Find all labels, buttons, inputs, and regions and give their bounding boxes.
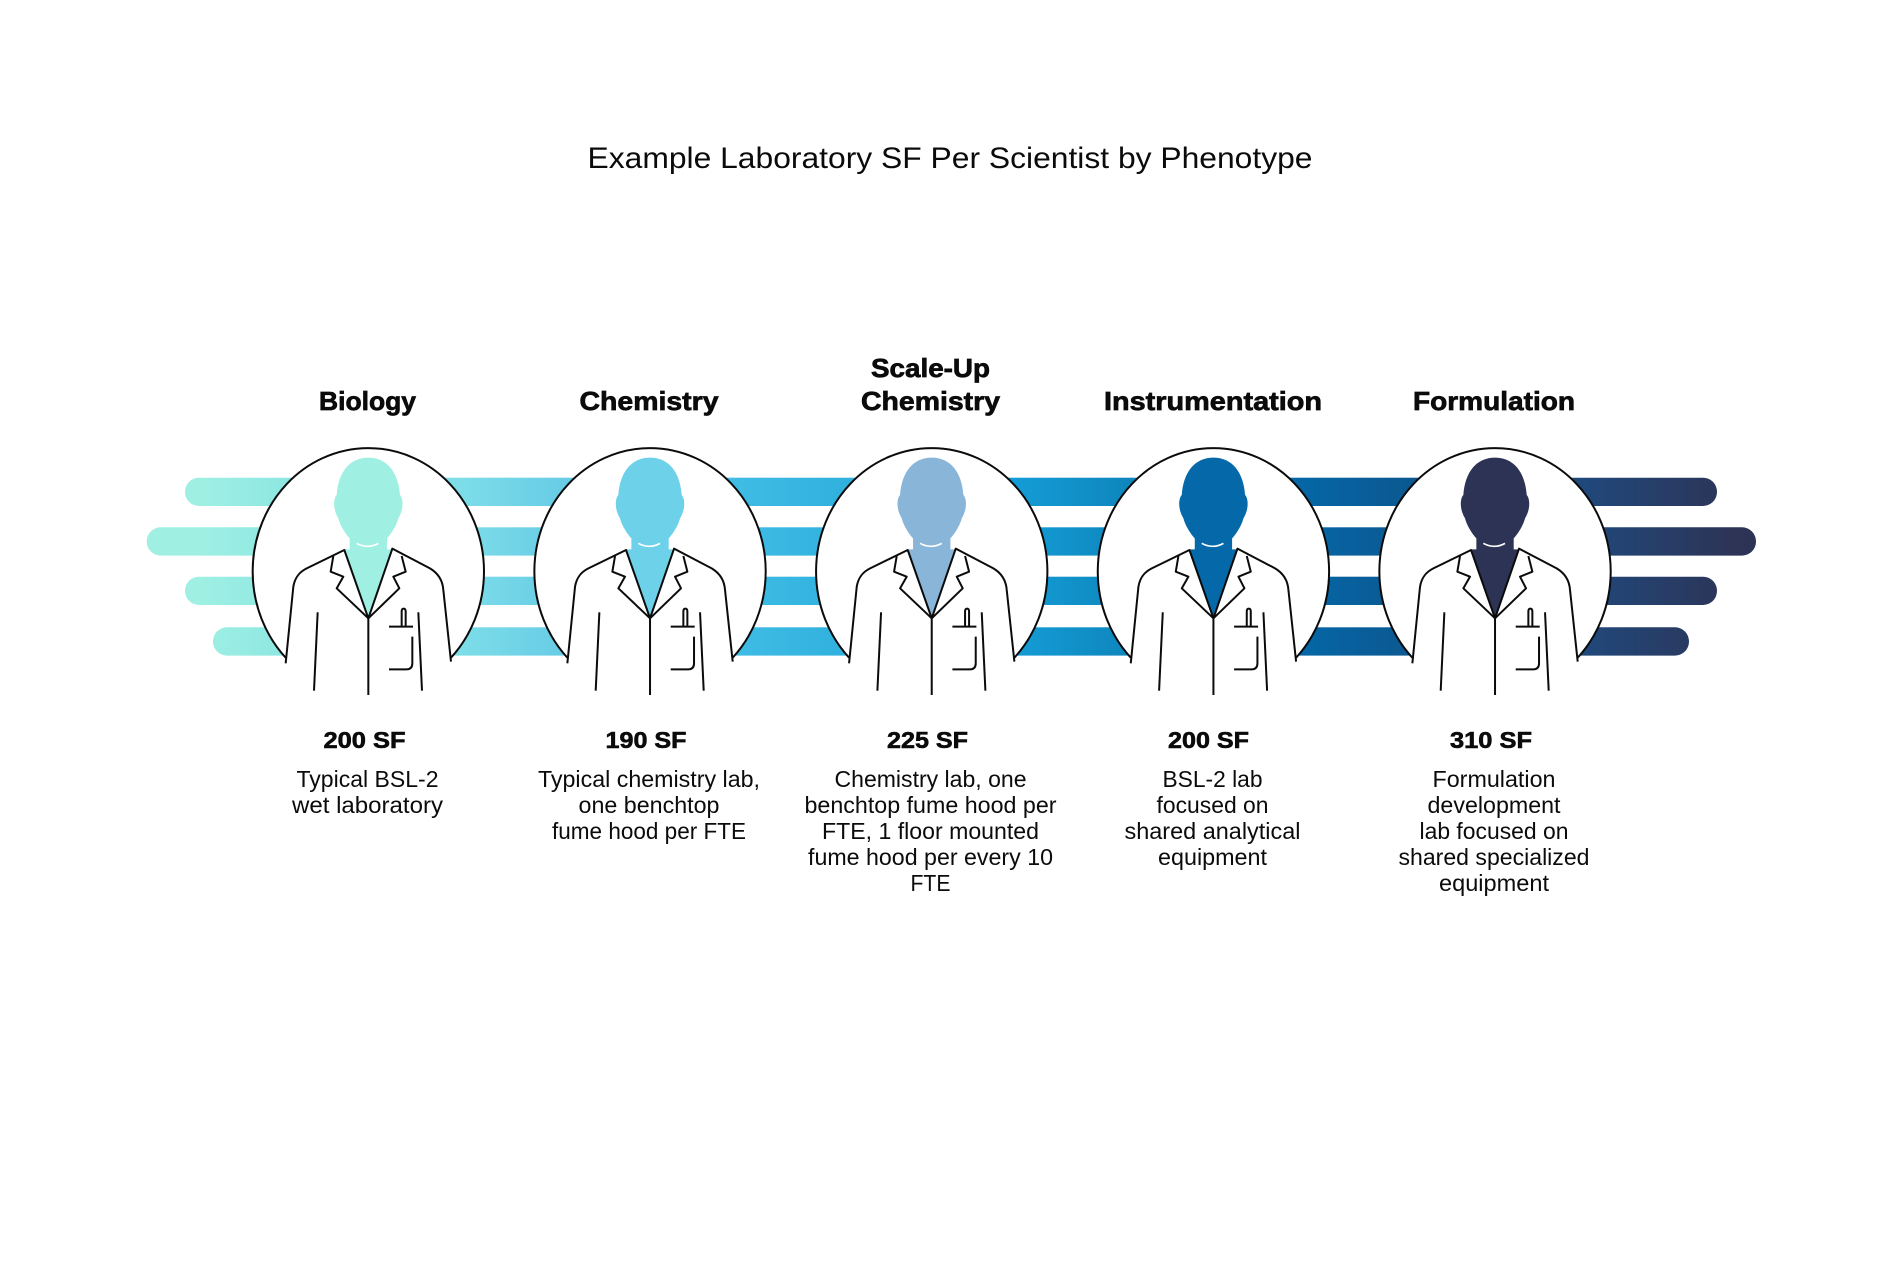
panel: Formulation — [1379, 386, 1611, 896]
description: Scale-Up Chemistry — [804, 766, 1057, 896]
description: Formulation: equipment — [1439, 870, 1550, 896]
description: Biology: wet laboratory — [291, 792, 444, 818]
description: Chemistry: Typical chemistry lab, — [538, 766, 760, 792]
panel: Scale-Up Chemistry — [804, 353, 1057, 896]
description: Scale-Up Chemistry: fume hood per every 10 — [808, 844, 1053, 870]
value: 200 SF: 200 SF — [1168, 727, 1249, 753]
icon: scientist, Chemistry — [534, 448, 766, 695]
description: Scale-Up Chemistry: Chemistry lab, one — [834, 766, 1026, 792]
description: Scale-Up Chemistry: benchtop fume hood per — [804, 792, 1057, 818]
bars: Chemistry to Scale-Up Chemistry — [650, 478, 932, 656]
description: Instrumentation: BSL-2 lab — [1162, 766, 1262, 792]
description: Chemistry: fume hood per FTE — [552, 818, 746, 844]
description: Biology: Typical BSL-2 — [296, 766, 438, 792]
description: Scale-Up Chemistry: FTE, 1 floor mounted — [822, 818, 1039, 844]
panel: Biology — [253, 386, 484, 818]
bars: left of Biology — [147, 478, 368, 656]
description: Formulation: lab focused on — [1420, 818, 1568, 844]
value: 200 SF: 200 SF — [324, 727, 406, 753]
description: Chemistry: one benchtop — [578, 792, 720, 818]
description: Instrumentation — [1124, 766, 1300, 870]
description: Formulation: Formulation — [1432, 766, 1556, 792]
icon: scientist, Instrumentation — [1098, 448, 1329, 695]
icon: scientist, Formulation — [1379, 448, 1611, 695]
title: Example Laboratory SF Per Scientist by Phenotype — [588, 142, 1312, 175]
striped bars band — [147, 478, 1756, 656]
icon: scientist, Biology — [253, 448, 484, 695]
bars: right of Formulation — [1495, 478, 1756, 656]
heading: Instrumentation: Instrumentation — [1104, 386, 1322, 416]
value: 225 SF: 225 SF — [887, 727, 968, 753]
value: 310 SF: 310 SF — [1450, 727, 1532, 753]
description: Formulation: development — [1428, 792, 1561, 818]
description: Biology — [291, 766, 444, 818]
bars: Instrumentation to Formulation — [1213, 478, 1495, 656]
description: Formulation — [1398, 766, 1590, 896]
value: 190 SF: 190 SF — [606, 727, 686, 753]
heading: Scale-Up Chemistry: Chemistry — [861, 386, 1001, 416]
description: Scale-Up Chemistry: FTE — [910, 870, 950, 896]
description: Instrumentation: focused on — [1156, 792, 1268, 818]
heading: Scale-Up Chemistry: Scale-Up — [871, 353, 990, 383]
description: Instrumentation: shared analytical — [1124, 818, 1300, 844]
heading: Scale-Up Chemistry — [861, 353, 1001, 416]
icon: scientist, Scale-Up Chemistry — [816, 448, 1047, 695]
heading: Chemistry: Chemistry — [580, 386, 719, 416]
description: Chemistry — [538, 766, 760, 844]
bars: Biology to Chemistry — [368, 478, 650, 656]
heading: Formulation: Formulation — [1413, 386, 1575, 416]
panel: Chemistry — [534, 386, 766, 844]
panel: Instrumentation — [1098, 386, 1329, 870]
description: Instrumentation: equipment — [1158, 844, 1268, 870]
description: Formulation: shared specialized — [1398, 844, 1590, 870]
heading: Biology: Biology — [319, 386, 417, 416]
bars: Scale-Up Chemistry to Instrumentation — [932, 478, 1214, 656]
